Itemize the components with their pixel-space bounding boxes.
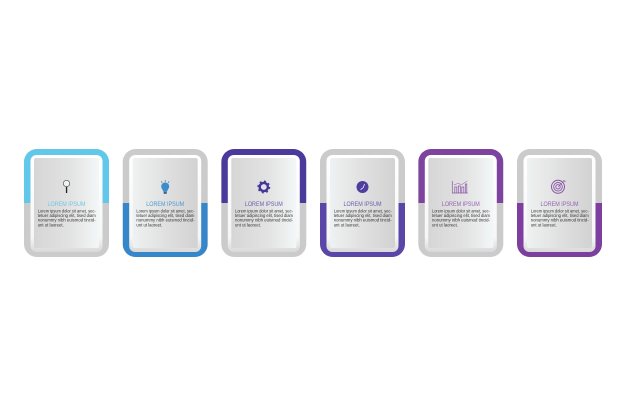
card 6 inner panel xyxy=(524,155,596,252)
card 4 xyxy=(320,149,405,257)
card 5 body text: tetuer adipiscing elit, tised diam xyxy=(432,213,490,218)
card 3 xyxy=(221,149,306,257)
card 5 body text xyxy=(432,208,491,227)
icon: light bulb xyxy=(161,180,169,194)
card 5 heading: LOREM IPSUM xyxy=(442,201,480,208)
card 6 frame xyxy=(517,149,602,257)
icon: target xyxy=(552,180,566,193)
card 5 xyxy=(418,149,503,257)
card 2 heading: LOREM IPSUM xyxy=(146,201,184,208)
card 6 body text: unt ut laoreet. xyxy=(531,222,557,227)
card 5 body text: Lorem ipsum dolor sit amet, sec- xyxy=(432,208,491,214)
card 6 body text: Lorem ipsum dolor sit amet, sec- xyxy=(531,208,589,214)
card 3 body text: tetuer adipiscing elit, tised diam xyxy=(235,213,293,218)
card 3 frame xyxy=(221,149,306,257)
card 1 body text: unt ut laoreet. xyxy=(38,222,64,227)
card 3 body text xyxy=(235,208,294,227)
card 6 xyxy=(517,149,602,257)
icon: clock xyxy=(356,181,368,193)
card 5 frame xyxy=(418,149,503,257)
card 4 body text: Lorem ipsum dolor sit amet, sec- xyxy=(334,208,392,214)
card 1 heading: LOREM IPSUM xyxy=(48,201,86,208)
card 4 body text xyxy=(334,208,392,227)
card 2 body text xyxy=(136,208,195,227)
card 6 body text: tetuer adipiscing elit, tised diam xyxy=(531,213,589,218)
card 5 body text: unt ut laoreet. xyxy=(432,222,458,227)
card 6 body text xyxy=(531,208,589,227)
card 4 heading: LOREM IPSUM xyxy=(344,201,382,208)
card 2 body text: nonummy nibh euismod tincid- xyxy=(136,218,195,223)
card 1 frame xyxy=(24,149,109,257)
card 5 body text: nonummy nibh euismod tincid- xyxy=(432,218,491,223)
card 1 body text: Lorem ipsum dolor sit amet, sec- xyxy=(38,208,96,214)
card 1 body text: nonummy nibh euismod tincid- xyxy=(38,218,96,223)
card 4 body text: tetuer adipiscing elit, tised diam xyxy=(334,213,392,218)
card 5 inner panel xyxy=(425,155,497,252)
card 6 body text: nonummy nibh euismod tincid- xyxy=(531,218,589,223)
infographic xyxy=(24,149,602,257)
card 4 frame xyxy=(320,149,405,257)
card 2 frame xyxy=(123,149,208,257)
card 1 body text xyxy=(38,208,96,227)
card 3 heading: LOREM IPSUM xyxy=(245,201,283,208)
icon: bar chart xyxy=(452,181,468,193)
card 3 body text: nonummy nibh euismod tincid- xyxy=(235,218,294,223)
icon: gear xyxy=(258,181,270,193)
card 2 body text: tetuer adipiscing elit, tised diam xyxy=(136,213,195,218)
card 4 inner panel xyxy=(326,155,398,252)
card 2 inner panel xyxy=(129,155,201,252)
card 2 body text: unt ut laoreet. xyxy=(136,222,162,227)
card 3 inner panel xyxy=(228,155,300,252)
card 4 body text: nonummy nibh euismod tincid- xyxy=(334,218,392,223)
card 2 body text: Lorem ipsum dolor sit amet, sec- xyxy=(136,208,195,214)
card 3 body text: unt ut laoreet. xyxy=(235,222,261,227)
card 6 heading: LOREM IPSUM xyxy=(540,201,578,208)
card 4 body text: unt ut laoreet. xyxy=(334,222,360,227)
card 1 inner panel xyxy=(30,155,102,252)
card 1 xyxy=(24,149,109,257)
icon: magnifying glass xyxy=(63,180,70,193)
card 3 body text: Lorem ipsum dolor sit amet, sec- xyxy=(235,208,294,214)
card 1 body text: tetuer adipiscing elit, tised diam xyxy=(38,213,96,218)
card 2 xyxy=(123,149,208,257)
